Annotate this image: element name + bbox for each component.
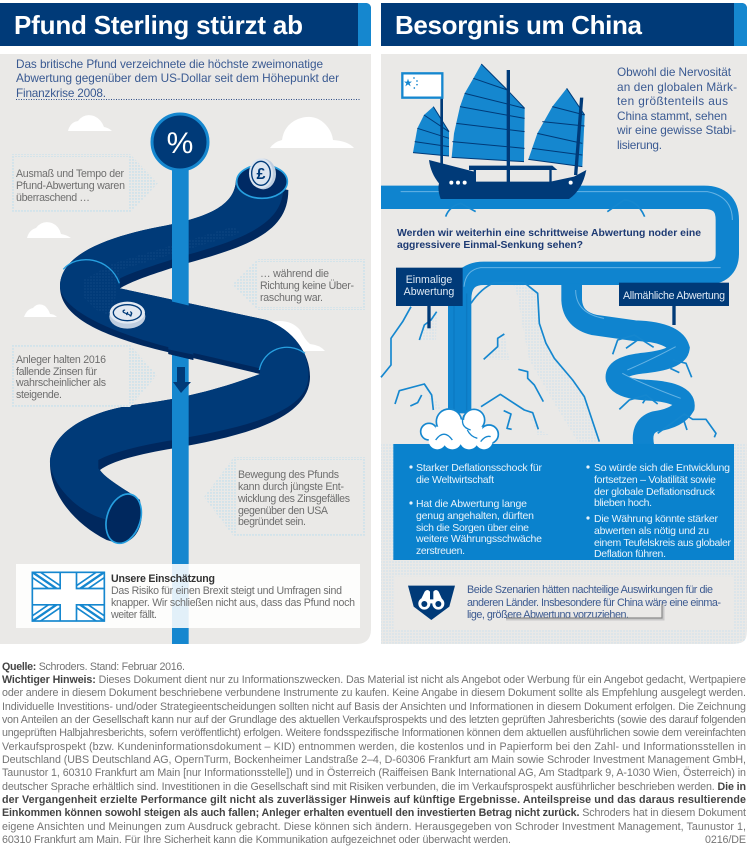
coin: top pound	[249, 158, 276, 189]
callout: Bewegung: begründet sein.	[238, 516, 306, 528]
arrow on bar	[173, 367, 191, 393]
closing text: anderen Länder. Insbesondere für China wäre eine einma-	[467, 597, 721, 609]
overlay shadow box	[506, 604, 664, 620]
callout: Ausmaß und Tempo	[11, 154, 158, 213]
lower grey band	[393, 577, 734, 630]
callout: Bewegung: Bewegung des Pfunds	[238, 469, 339, 481]
bullets left: zerstreuen.	[416, 545, 465, 557]
intro text: wir eine gewisse Stabi-	[616, 123, 736, 137]
intro text: China stammt, sehen	[617, 109, 727, 123]
box: Unsere Einschätzung: knapper. Wir schließen nicht aus, dass das Pfund noch	[111, 597, 355, 609]
footer disclaimer: deutscher Sprache erhältlich sind. Investitionen in die Gesellschaft sind mit Risiken verbunden, die im Verkaufsprospekt ausführlicher beschrieben werden. Die in	[2, 781, 746, 793]
icon: union jack	[32, 572, 105, 622]
ship	[402, 64, 586, 199]
clouds	[24, 115, 354, 351]
callout: Bewegung: kann durch jüngste Ent-	[238, 481, 344, 493]
bullets right	[586, 462, 732, 560]
pipe ribbon with coins	[50, 158, 310, 644]
bullets right: einem Teufelskreis aus globaler	[594, 537, 732, 549]
callout: Richtung: Richtung keine Über-	[260, 280, 354, 292]
mountain outlines	[381, 200, 716, 442]
footer disclaimer: 60310 Frankfurt am Main. Für Ihre Sicherheit kann die Kommunikation aufgezeichnet oder überwacht werden.	[2, 834, 511, 846]
callout: Ausmaß und Tempo: Pfund-Abwertung waren	[16, 180, 125, 192]
label text: Einmalige Abwertung: Abwertung	[404, 286, 454, 298]
intro text: Obwohl die Nervosität	[617, 65, 732, 79]
coin: top pound: £	[257, 166, 266, 183]
pipe silhouette	[50, 180, 310, 543]
callout: Bewegung: wicklung des Zinsgefälles	[237, 493, 350, 505]
pipe end highlights	[63, 260, 305, 370]
question: Werden wir weiterhin eine schrittweise Abwertung noder eine	[397, 228, 701, 239]
callout: Bewegung: gegenüber den USA	[238, 505, 329, 517]
heading: Pfund Sterling stürzt ab	[0, 3, 371, 46]
footer disclaimer: ungeprüften Halbjahresberichts, sofern veröffentlicht) erfolgen. Weitere fondsspezifische Informationen können dem aktuellen ausführlichen sowie dem vereinfachten	[2, 727, 746, 739]
right panel background	[381, 54, 747, 644]
panel: Pfund Sterling	[0, 3, 371, 644]
bullets right: blieben hoch.	[594, 497, 652, 509]
dotted frame	[381, 444, 747, 643]
footer disclaimer: von Anteilen an der Gesellschaft kann nur auf der Grundlage des aktuellen Verkaufsprospekts und des letzten geprüften Jahresberichts (sowie des darauf folgenden	[2, 714, 746, 726]
box: Unsere Einschätzung: Unsere Einschätzung	[111, 573, 215, 585]
bullets right: Deflation führen.	[594, 548, 666, 560]
heading: Pfund Sterling stürzt ab: Pfund Sterling stürzt ab	[14, 10, 303, 40]
callout: Anleger: steigende.	[16, 389, 62, 401]
label text: Allmähliche Abwertung: Allmähliche Abwertung	[623, 290, 725, 302]
bullets left	[409, 462, 542, 557]
bullets right: Die Währung könnte stärker	[594, 513, 718, 525]
sails	[413, 64, 585, 167]
hull	[429, 160, 586, 199]
callout: Anleger: wahrscheinlicher als	[15, 377, 106, 389]
coin: middle pound	[109, 302, 145, 329]
portholes	[449, 181, 573, 185]
coin: middle pound: £	[119, 307, 136, 318]
callout: Richtung	[232, 259, 365, 310]
footer disclaimer: Deutschland (UBS Deutschland AG, OpernTurm, Bockenheimer Landstraße 2–4, D-60306 Frankfurt am Main sowie Schroder Investment Management GmbH,	[2, 754, 746, 766]
callout: Ausmaß und Tempo: Ausmaß und Tempo der	[16, 168, 124, 180]
pipe section passing over bar	[168, 301, 193, 360]
footer disclaimer: oder andere in diesem Dokument beschriebene verbundene Instrumente zu kaufen. Keine Angabe in diesem Dokument sollte als Empfehlung ausgelegt werden.	[2, 687, 746, 699]
question: aggressivere Einmal-Senkung sehen?	[397, 240, 583, 251]
intro text: an den globalen Märk-	[617, 80, 737, 94]
river	[381, 192, 732, 448]
blue scenario box	[393, 444, 734, 560]
left panel background	[0, 54, 371, 644]
intro text	[16, 57, 360, 100]
callout: Richtung: raschung war.	[260, 292, 323, 304]
footer disclaimer: Verkaufsprospekt (bzw. Kundeninformationsdokument – KID) entnommen werden, die kostenlos und in Papierform bei den Zahl- und Informationsstellen in	[2, 741, 746, 753]
bullets left: Starker Deflationsschock für	[416, 462, 542, 474]
bullets left: die Weltwirtschaft	[416, 474, 494, 486]
intro text: Das britische Pfund verzeichnete die höchste zweimonatige	[16, 57, 323, 71]
open pipe top	[237, 165, 287, 198]
panel: Besorgnis um China	[381, 3, 747, 644]
box: Unsere Einschätzung: Das Risiko für einen Brexit steigt und Umfragen sind	[111, 585, 342, 597]
footer disclaimer: Individuelle Investitions- und/oder Strategieentscheidungen sollten nicht auf Basis der Ansichten und Informationen in diesem Dokument erfolgen. Die Zeichnung	[2, 701, 746, 713]
bullets left: Hat die Abwertung lange	[416, 498, 527, 510]
callout: Richtung: … während die	[260, 268, 329, 280]
heading: Besorgnis um China: Besorgnis um China	[395, 10, 643, 40]
footer disclaimer: Einkommen können sowohl steigen als auch fallen; Anleger erhalten eventuell den investierten Betrag nicht zurück. Schroders hat in diesem Dokument	[2, 807, 746, 819]
open pipe bottom	[100, 489, 147, 548]
footer disclaimer: Taunustor 1, 60310 Frankfurt am Main [nur Informationsstelle]) und in Österreich (Raiffeisen Bank International AG, Am Stadtpark 9, A-1030 Wien, Österreich) in	[2, 767, 746, 779]
callout: Anleger	[11, 345, 157, 407]
vertical bar	[172, 167, 189, 644]
intro text: lisierung.	[617, 138, 662, 152]
intro text: ten größtenteils aus	[617, 94, 728, 108]
cabin	[469, 166, 557, 183]
footer disclaimer: Wichtiger Hinweis: Dieses Dokument dient nur zu Informationszwecken. Das Material ist nicht als Angebot oder Werbung für ein Angebot gedacht, Wertpapiere	[2, 674, 746, 686]
masts	[440, 70, 583, 183]
bullets left: genug angehalten, dürften	[416, 510, 534, 522]
bullets right: der globale Deflationsdruck	[594, 486, 716, 498]
cliff shading	[419, 283, 599, 442]
bullets right: fortsetzen – Volatilität sowie	[594, 474, 716, 486]
bullets right: abwerten als nötig und zu	[594, 525, 709, 537]
percent circle	[152, 114, 208, 170]
box: Unsere Einschätzung	[16, 564, 360, 628]
intro text: Finanzkrise 2008.	[16, 86, 106, 100]
footer disclaimer	[2, 661, 746, 846]
callout: Anleger: Anleger halten 2016	[16, 354, 106, 366]
icon: binoculars shield	[408, 586, 455, 620]
bullets left: sich die Sorgen über eine	[416, 522, 529, 534]
closing text	[467, 584, 721, 621]
box: Unsere Einschätzung: weiter fällt.	[110, 609, 157, 621]
label: Allmähliche Abwertung	[619, 283, 729, 325]
closing text: lige, größere Abwertung vorzuziehen.	[467, 609, 629, 621]
callout: Bewegung	[204, 457, 365, 537]
heading: Besorgnis um China	[381, 3, 747, 46]
label text: Einmalige Abwertung: Einmalige	[406, 274, 452, 286]
intro text: Abwertung gegenüber dem US-Dollar seit dem Höhepunkt der	[16, 71, 339, 85]
percent circle: %	[167, 127, 193, 160]
waterfall splash	[421, 409, 498, 449]
label text: Einmalige Abwertung	[404, 274, 454, 298]
sail battens	[413, 64, 585, 167]
footer disclaimer: 0216/DE	[705, 834, 746, 846]
intro text	[616, 65, 737, 152]
closing text: Beide Szenarien hätten nachteilige Auswirkungen für die	[467, 584, 713, 596]
footer disclaimer: eigene Ansichten und Meinungen zum Ausdruck gebracht. Diese können sich ändern. Herausgegeben von Schroder Investment Management, Taunustor 1,	[2, 821, 746, 833]
question	[397, 228, 701, 251]
callout: Anleger: fallende Zinsen für	[16, 366, 97, 378]
label: Einmalige Abwertung	[396, 268, 463, 328]
bullets right: So würde sich die Entwicklung	[594, 462, 730, 474]
pipe halftone shading	[83, 227, 240, 317]
flag	[402, 73, 442, 98]
footer disclaimer: der Vergangenheit erzielte Performance gilt nicht als zuverlässiger Hinweis auf künftige Ergebnisse. Anteilspreise und das daraus resultierende	[2, 794, 746, 806]
illustration	[381, 64, 747, 643]
bullets left: weitere Währungsschwäche	[415, 533, 542, 545]
callout: Ausmaß und Tempo: überraschend …	[16, 192, 90, 204]
footer disclaimer: Quelle: Schroders. Stand: Februar 2016.	[2, 661, 185, 673]
pipe top face	[50, 180, 308, 520]
